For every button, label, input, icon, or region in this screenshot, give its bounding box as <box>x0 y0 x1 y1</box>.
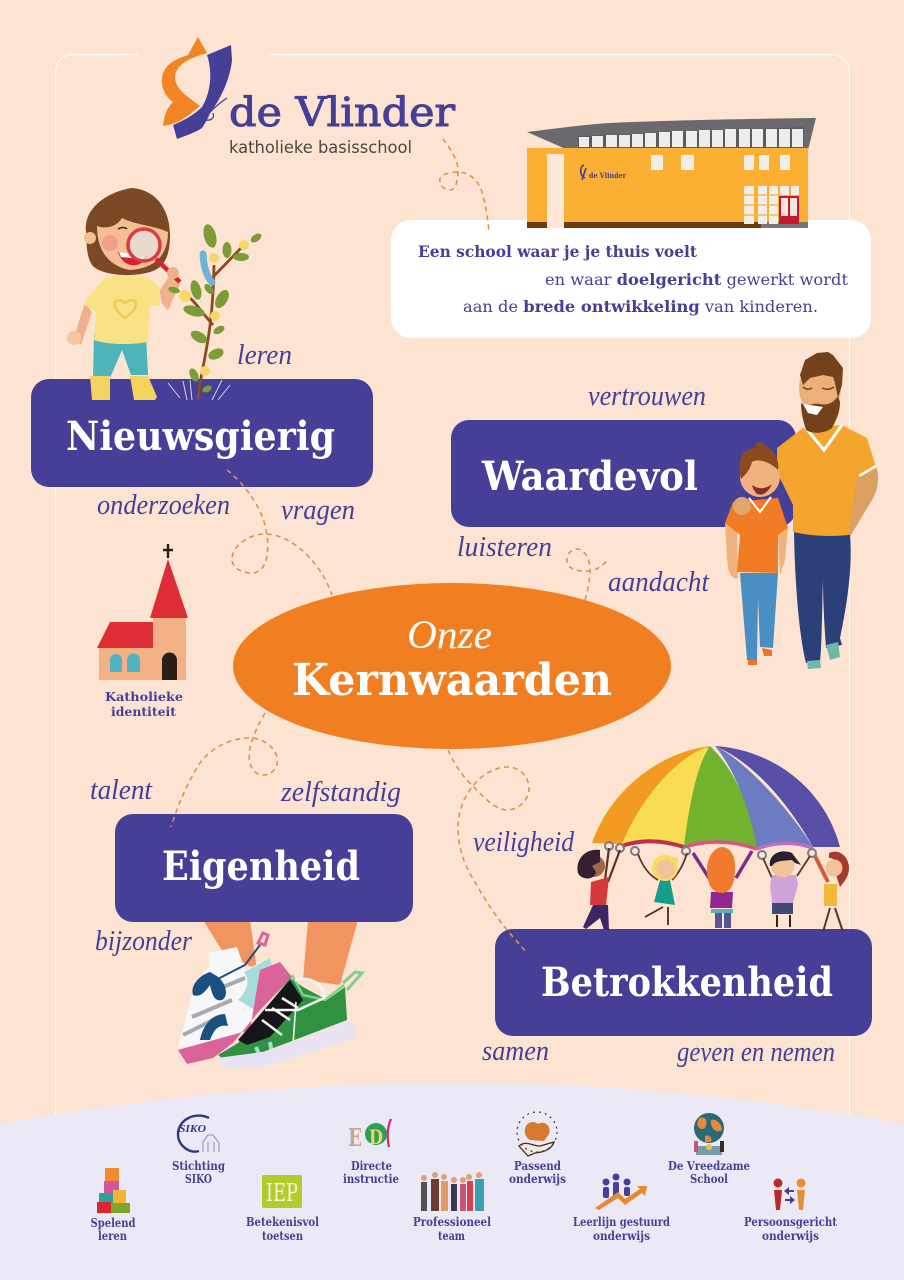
script title: Onze: Onze <box>407 612 492 657</box>
item: Persoonsgericht onderwijs: onderwijs <box>762 1228 819 1243</box>
word: aandacht: aandacht <box>608 566 710 598</box>
item: De Vreedzame School <box>668 1113 750 1186</box>
item: Directe instructie: instructie <box>343 1171 399 1186</box>
label: Passend <box>514 1158 561 1173</box>
item: Spelend leren <box>90 1168 136 1243</box>
illustration: school building <box>527 118 816 228</box>
dashed connector: Eigenheid to centre <box>171 713 277 827</box>
dashed connector: logo to card <box>440 139 489 233</box>
label: Katholieke identiteit: identiteit <box>111 704 176 719</box>
word: bijzonder: bijzonder <box>95 925 193 957</box>
icon: EDI: E <box>348 1123 362 1152</box>
icon: two persons with arrows <box>774 1178 806 1210</box>
label: Directe <box>351 1158 392 1173</box>
panel: Betrokkenheid <box>495 929 872 1036</box>
word: veiligheid: veiligheid <box>473 826 574 858</box>
heading: Betrokkenheid: Betrokkenheid <box>541 959 833 1006</box>
bottom lavender band <box>0 1083 904 1280</box>
icon: EDI: D <box>369 1125 383 1149</box>
item: Leerlijn gestuurd onderwijs <box>573 1174 670 1243</box>
item: Professioneel team <box>413 1172 491 1243</box>
father <box>777 352 878 669</box>
icon: hand with puzzle <box>517 1112 557 1156</box>
statement line 1: Een school waar je je thuis voelt <box>418 242 698 261</box>
word: samen: samen <box>482 1035 549 1067</box>
illustration: children with parachute <box>577 746 849 932</box>
word: zelfstandig: zelfstandig <box>280 776 401 808</box>
dashed connector: Betrokkenheid to centre <box>448 750 529 953</box>
word: talent: talent <box>90 774 153 806</box>
label: Leerlijn gestuurd <box>573 1214 670 1229</box>
item: Directe instructie <box>343 1119 399 1186</box>
icon: SIKO: SIKO <box>179 1124 206 1135</box>
dashed connector: Nieuwsgierig to centre <box>227 470 332 595</box>
parachute <box>592 746 840 859</box>
word: vertrouwen: vertrouwen <box>588 380 706 412</box>
word: onderzoeken: onderzoeken <box>97 489 230 521</box>
heading: Waardevol: Waardevol <box>481 453 698 500</box>
child 3 <box>693 847 752 928</box>
heading: Nieuwsgierig: Nieuwsgierig <box>66 413 335 460</box>
logo <box>162 37 456 158</box>
label: Professioneel <box>413 1214 491 1229</box>
dashed connector: Waardevol to centre <box>567 549 608 600</box>
panel: Waardevol <box>451 420 796 527</box>
panel: school statement card <box>391 220 871 338</box>
icon: IEP: IEP <box>266 1179 298 1207</box>
item: Leerlijn gestuurd onderwijs: onderwijs <box>593 1228 650 1243</box>
label: De Vreedzame <box>668 1158 750 1173</box>
logo subtitle: katholieke basisschool <box>229 138 412 158</box>
panel: Onze Kernwaarden ellipse <box>233 583 671 749</box>
label: Stichting <box>172 1158 225 1173</box>
word: luisteren: luisteren <box>457 531 552 563</box>
child 2 <box>638 853 687 925</box>
icon: magnifier <box>128 229 180 282</box>
statement line 2: en waar doelgericht gewerkt wordt <box>545 270 849 289</box>
illustration: church <box>97 544 188 680</box>
item: Spelend leren: leren <box>98 1228 127 1243</box>
child 4 <box>763 851 810 927</box>
item: Passend onderwijs: onderwijs <box>509 1171 566 1186</box>
illustration: girl with magnifier and plant <box>67 188 263 400</box>
label: Katholieke identiteit <box>105 689 183 719</box>
heading: Eigenheid: Eigenheid <box>162 843 360 890</box>
label: Betekenisvol <box>246 1214 319 1229</box>
item: Betekenisvol toetsen <box>246 1175 319 1243</box>
word: geven en nemen: geven en nemen <box>677 1036 835 1068</box>
item: Professioneel team: team <box>438 1228 465 1243</box>
illustration: sneakers <box>178 920 362 1068</box>
girl <box>67 188 180 400</box>
logo wordmark: de Vlinder <box>229 90 456 136</box>
label: Katholieke identiteit: Katholieke <box>105 689 183 704</box>
icon: team <box>421 1172 484 1211</box>
statement line 3: aan de brede ontwikkeling van kinderen. <box>463 297 818 316</box>
item: De Vreedzame School: School <box>690 1171 728 1186</box>
item: Persoonsgericht onderwijs <box>744 1178 837 1243</box>
boy <box>725 442 788 665</box>
label: Spelend <box>90 1215 136 1230</box>
icon: EDI <box>348 1119 391 1152</box>
plant with caterpillar <box>167 223 263 400</box>
panel: Eigenheid <box>115 814 413 922</box>
child 1 <box>577 848 620 930</box>
item: Stichting SIKO: SIKO <box>185 1171 212 1186</box>
icon: butterfly <box>162 37 232 139</box>
panel: Nieuwsgierig <box>31 379 373 487</box>
item: Stichting SIKO <box>172 1116 225 1186</box>
label: Persoonsgericht <box>744 1214 837 1229</box>
illustration: father and son <box>725 352 878 669</box>
item: Passend onderwijs <box>509 1112 566 1186</box>
child 5 <box>815 852 849 932</box>
heading: Kernwaarden: Kernwaarden <box>292 655 612 706</box>
word: leren: leren <box>237 339 292 371</box>
icon: rising arrow with people <box>595 1174 647 1210</box>
building sign: de Vlinder <box>589 171 627 180</box>
icon: globe with children <box>694 1113 724 1155</box>
word: vragen: vragen <box>281 494 355 526</box>
icon: number blocks <box>97 1168 130 1213</box>
item: Betekenisvol toetsen: toetsen <box>262 1228 303 1243</box>
